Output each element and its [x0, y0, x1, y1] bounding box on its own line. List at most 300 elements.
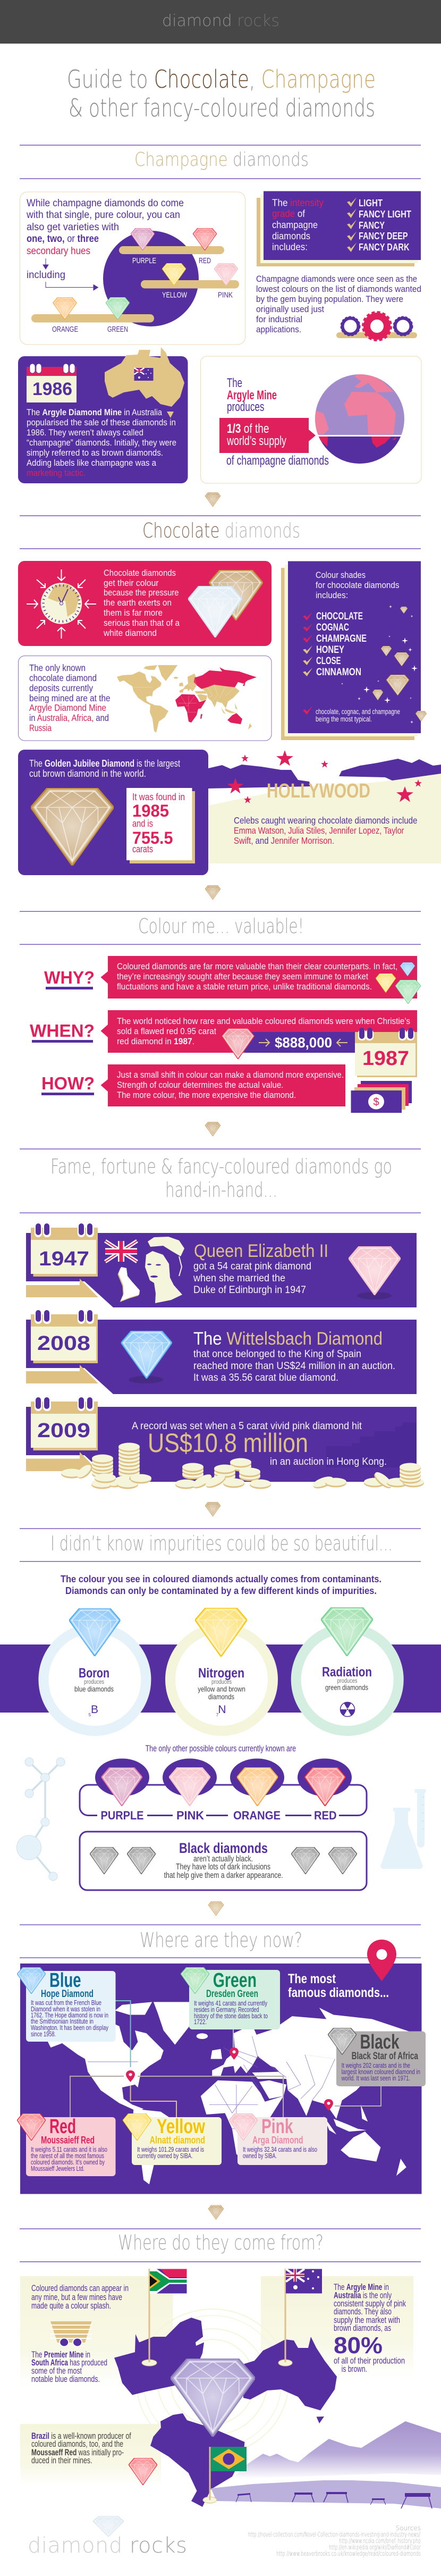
pressure text: serious than that of a — [104, 618, 180, 628]
black diamond text: aren’t actually black. — [193, 1855, 253, 1864]
Argyle paragraph: Adding labels like champagne was a — [27, 458, 157, 468]
flag: UK — [105, 1241, 137, 1262]
jubilee text — [29, 758, 180, 779]
text: Wittelsbach: The Wittelsbach Diamond — [193, 1329, 383, 1349]
text: Argyle Australia: The Argyle Mine in — [334, 2283, 389, 2292]
world map — [44, 2002, 419, 2184]
colour labels: YELLOW — [162, 290, 188, 300]
text: Premier Mine: notable blue diamonds. — [31, 2374, 100, 2384]
purple band — [0, 1644, 441, 1713]
Argyle paragraph: marketing tactic. — [27, 468, 86, 478]
card: Pink — [229, 2113, 327, 2165]
section heading: where are they now: Where are they now? — [140, 1928, 302, 1952]
Nitrogen text: 7 — [216, 1713, 219, 1717]
panel: 1986 Argyle — [18, 347, 188, 483]
card: Red: the rarest of all the most famous — [31, 2152, 104, 2160]
map: Africa — [114, 2318, 204, 2395]
Hollywood sign: HOLLYWOOD — [267, 780, 370, 802]
pressure arrows — [27, 569, 96, 639]
text: Argyle Australia: supply the market with — [334, 2315, 400, 2325]
flag: Brazil — [203, 2447, 247, 2503]
shades intro: for chocolate diamonds — [316, 580, 400, 590]
panel: 2009 record — [26, 1397, 424, 1491]
when text — [117, 1016, 410, 1046]
text: other colours: The only other possible colours currently known are — [146, 1744, 296, 1753]
Argyle paragraph: 1986. They weren’t always called — [27, 428, 143, 438]
Nitrogen text: produces — [211, 1679, 232, 1685]
intro text — [26, 198, 184, 281]
shades intro — [316, 570, 400, 600]
panel: other colours — [80, 1759, 367, 1822]
card: Black: Black — [360, 2031, 400, 2053]
panel backgrounds — [20, 2276, 413, 2486]
colour labels: ORANGE — [52, 325, 78, 334]
coins — [61, 1443, 424, 1491]
note: chocolate, cognac, and champagne — [316, 708, 400, 716]
why text: fluctuations and have a stable return price, unlike traditional diamonds. — [117, 981, 372, 992]
intensity text: diamonds — [272, 231, 310, 241]
card: Green: Dresden Green — [206, 1988, 258, 2000]
text: champagne history: applications. — [256, 325, 301, 334]
text: Argyle Australia: brown diamonds, as — [334, 2323, 391, 2333]
why text: Coloured diamonds are far more valuable than their clear counterparts. In fact, — [117, 961, 397, 971]
Boron text: produces — [84, 1679, 104, 1685]
calendar 1987 — [355, 1028, 417, 1077]
gems: black — [90, 1847, 357, 1874]
text: Queen: when she married the — [193, 1273, 285, 1284]
header bar — [0, 0, 441, 44]
gem: yellow — [195, 1608, 247, 1657]
icon: gears — [336, 313, 417, 340]
text: Wittelsbach: reached more than US$24 million in an auction. — [193, 1361, 395, 1372]
text: contaminants intro — [61, 1573, 381, 1596]
title: Guide to Chocolate, Champagne — [67, 65, 376, 94]
colour labels: PINK — [218, 290, 233, 300]
text: coloured diamonds appear: Coloured diamonds can appear in — [31, 2284, 129, 2293]
panel: world map of famous diamonds — [17, 1964, 426, 2194]
headline — [288, 1971, 389, 2000]
fact card: and is — [132, 818, 153, 829]
Argyle paragraph: popularised the sale of these diamonds in — [27, 418, 176, 427]
card: Blue: Blue — [49, 1969, 81, 1992]
share text: 1/3 of the — [227, 422, 269, 436]
text: coloured diamonds appear — [31, 2284, 129, 2311]
card: Yellow: currently owned by SIBA. — [137, 2152, 193, 2160]
connector lines — [70, 2001, 381, 2117]
card: Red: It weighs 5.11 carats and it is also — [31, 2145, 107, 2153]
intensity list — [359, 198, 411, 253]
bars — [31, 246, 239, 322]
intro text: secondary hues — [27, 246, 90, 257]
card: Blue: Washington. It has been on display — [31, 2024, 108, 2032]
text: contaminants intro: The colour you see in coloured diamonds actually comes from contaminants. — [61, 1573, 381, 1584]
fact card: 1985 — [132, 801, 169, 820]
colour labels: PURPLE — [132, 256, 156, 265]
gem: white — [188, 586, 242, 637]
card: Red: coloured diamonds. It’s owned by — [31, 2158, 105, 2166]
shades list — [316, 611, 367, 678]
globe — [313, 372, 406, 466]
card: Blue: 1762. The Hope diamond is now in — [31, 2011, 108, 2019]
card: Pink: owned by SIBA. — [243, 2152, 277, 2160]
text: Argyle Australia: 80% — [334, 2332, 383, 2359]
card: Pink: Pink — [261, 2116, 293, 2138]
gem: red — [222, 1028, 255, 1059]
colour labels: RED — [199, 256, 211, 265]
gem: orange — [237, 1767, 278, 1806]
calendar 2008 — [31, 1310, 98, 1363]
banner arrow — [26, 1365, 98, 1383]
celebs text: Celebs caught wearing chocolate diamonds include — [234, 815, 418, 826]
text: champagne history: Champagne diamonds were once seen as the — [256, 274, 417, 284]
colour names: PINK — [176, 1809, 204, 1822]
Nitrogen text: N — [218, 1704, 226, 1716]
frame — [80, 1785, 367, 1815]
gem: chocolate — [209, 570, 263, 620]
section heading: colour me valuable: Colour me... valuable! — [138, 914, 304, 938]
text: Premier Mine: The Premier Mine in — [31, 2350, 90, 2360]
jubilee text: The Golden Jubilee Diamond is the largest — [29, 758, 180, 769]
shades list: CINNAMON — [316, 667, 361, 678]
ring: Radiation — [296, 1607, 398, 1731]
text: Wittelsbach: that once belonged to the King of Spain — [193, 1348, 361, 1360]
flag: South Africa — [142, 2269, 187, 2366]
shades intro: Colour shades — [316, 570, 366, 580]
intro text: one, two, or three — [27, 233, 99, 245]
share text: The — [227, 376, 242, 390]
banner arrow — [26, 1452, 98, 1471]
mining text: chocolate diamond — [29, 673, 97, 683]
title — [67, 65, 376, 122]
calendar 2009: 2009 — [37, 1420, 90, 1442]
logo text: diamond rocks — [28, 2533, 187, 2558]
fact card: 755.5 — [132, 828, 173, 848]
intensity text: The intensity — [272, 198, 324, 208]
colour names — [101, 1809, 337, 1822]
card: Red — [17, 2113, 116, 2176]
label: why: WHY? — [44, 968, 95, 987]
intro text: While champagne diamonds do come — [27, 198, 184, 209]
gem: blue — [69, 1608, 120, 1656]
fact card: carats — [132, 844, 153, 854]
label: when: WHEN? — [30, 1021, 95, 1041]
Boron text: B — [91, 1704, 98, 1716]
gem: green — [106, 297, 130, 320]
text: Queen: Duke of Edinburgh in 1947 — [193, 1285, 306, 1296]
text: Brazil: Moussaeff Red was initially pro- — [31, 2448, 124, 2457]
ring: Nitrogen — [170, 1608, 273, 1731]
text: Argyle Australia: consistent supply of pink — [334, 2299, 406, 2309]
panel: how — [41, 1064, 412, 1113]
intensity text: champagne — [272, 220, 318, 230]
banknotes: $ — [373, 1096, 379, 1108]
shades intro: includes: — [316, 590, 348, 600]
share text: world’s supply — [226, 434, 286, 448]
jubilee text: cut brown diamond in the world. — [29, 768, 146, 779]
calendar 1986: 1986 — [32, 379, 72, 399]
calendar 1947 — [31, 1223, 98, 1277]
shade check marks — [303, 612, 312, 715]
calendar 1987: 1987 — [362, 1047, 409, 1070]
gem: pink — [169, 1767, 210, 1806]
why text: they’re increasingly sought after because they seem immune to market — [117, 971, 368, 981]
panel: 2008 Wittelsbach — [26, 1310, 417, 1394]
colour names: RED — [314, 1809, 337, 1822]
Nitrogen text: yellow and brown — [198, 1684, 245, 1693]
Radiation text: green diamonds — [325, 1683, 368, 1692]
text: Brazil: duced in their mines. — [31, 2456, 92, 2465]
banknotes — [351, 1081, 412, 1113]
Nitrogen text: Nitrogen — [198, 1666, 244, 1681]
black diamond text: that help give them a darker appearance. — [164, 1871, 283, 1880]
fact card — [126, 788, 195, 863]
text: Brazil — [31, 2431, 131, 2465]
Boron text: Boron — [79, 1666, 109, 1681]
concentric rings — [137, 2309, 289, 2455]
section heading: fame fortune: hand-in-hand... — [165, 1178, 277, 1202]
gem: pink — [214, 263, 238, 286]
divider gem — [208, 2205, 224, 2219]
calendar 1986 — [27, 364, 77, 402]
colour labels: GREEN — [107, 325, 128, 334]
logo wordmark: diamond rocks — [162, 12, 279, 30]
card: Yellow — [123, 2113, 222, 2165]
gem: orange — [53, 297, 77, 320]
arrows — [43, 258, 98, 290]
text: coloured diamonds appear: made quite a colour splash. — [31, 2301, 111, 2311]
card: Red: Moussaieff Red — [41, 2135, 95, 2146]
Argyle paragraph: simply referred to as brown diamonds. — [27, 448, 163, 458]
illustration: flask and test tube — [380, 1789, 426, 1869]
how text: Just a small shift in colour can make a diamond more expensive. — [117, 1070, 344, 1080]
mining text: in Australia, Africa, and — [29, 712, 109, 723]
Nitrogen text — [198, 1666, 245, 1717]
gem: yellow — [162, 263, 186, 286]
Nitrogen text: diamonds — [208, 1692, 234, 1701]
gem: red — [129, 2458, 157, 2485]
city skyline — [326, 1422, 417, 1467]
text: Queen: Queen Elizabeth II — [194, 1241, 328, 1261]
text: Premier Mine: South Africa has produced — [31, 2358, 107, 2368]
pink arrow banner — [219, 418, 316, 453]
card: Green — [181, 1967, 280, 2029]
panel: where chocolate diamonds are mined — [18, 656, 272, 741]
when text: sold a flawed red 0.95 carat — [117, 1026, 216, 1036]
illustration: mountains — [211, 2421, 441, 2508]
text: Wittelsbach: It was a 35.56 carat blue diamond. — [193, 1372, 338, 1383]
card: Black: It weighs 202 carats and is the — [342, 2061, 410, 2069]
pressure text: the earth exerts on — [104, 598, 172, 608]
why text — [117, 961, 397, 992]
card: Pink: It weighs 32.34 carats and is also — [243, 2145, 317, 2153]
fact card: It was found in — [132, 792, 185, 802]
Boron text — [74, 1666, 114, 1717]
text: Argyle Australia: of all of their production — [334, 2356, 405, 2366]
panel: Argyle share of world supply — [201, 356, 421, 483]
mining text: Russia — [29, 723, 52, 733]
stars — [227, 750, 422, 803]
gem: purple — [101, 1767, 142, 1806]
mine stands — [236, 2492, 432, 2508]
shades list: COGNAC — [316, 622, 349, 633]
section heading: chocolate diamonds: Chocolate diamonds — [142, 519, 300, 542]
text: coloured diamonds appear: any mine, but a few mines have — [31, 2293, 122, 2302]
flag: Australia — [134, 368, 153, 381]
calendar 2009 — [31, 1397, 98, 1450]
Argyle paragraph — [27, 408, 176, 478]
how text — [117, 1070, 344, 1100]
note: being the most typical. — [316, 715, 372, 723]
black diamond text — [164, 1840, 283, 1880]
sparkles — [341, 605, 418, 724]
shades list: CLOSE — [316, 656, 341, 667]
card: Yellow: Yellow — [157, 2116, 205, 2138]
share text: of champagne diamonds — [226, 454, 329, 468]
map pins — [126, 2048, 333, 2111]
pressure text — [103, 568, 180, 638]
divider gem — [205, 885, 220, 900]
text: Queen: got a 54 carat pink diamond — [193, 1261, 311, 1272]
headline: famous diamonds... — [288, 1985, 389, 2000]
price bar: $888,000 — [275, 1035, 332, 1051]
ring: Boron — [44, 1608, 146, 1731]
card: Red: Moussaieff Jewelers Ltd. — [31, 2164, 84, 2172]
text: Premier Mine — [31, 2350, 107, 2384]
pressure text: Chocolate diamonds — [104, 568, 176, 578]
map: Australia — [105, 347, 184, 418]
panel: colour shades — [281, 561, 427, 740]
icon: mine cart — [50, 2321, 92, 2347]
text: Queen — [193, 1241, 328, 1296]
map: Brazil — [150, 2413, 244, 2507]
colour names: PURPLE — [101, 1809, 143, 1822]
panel: why chocolate is brown — [18, 561, 272, 646]
text: Brazil: coloured diamonds, too, and the — [31, 2439, 123, 2449]
text: Argyle Australia — [334, 2283, 406, 2374]
intensity text — [272, 198, 324, 252]
colour names: ORANGE — [233, 1809, 281, 1822]
text: champagne history: by the gem buying population. They were — [256, 295, 403, 304]
text: Wittelsbach — [193, 1329, 395, 1383]
gem: purple — [131, 228, 155, 250]
text: record — [132, 1421, 387, 1467]
mining text: deposits currently — [29, 683, 93, 693]
black diamond text: They have lots of dark inclusions — [176, 1862, 270, 1872]
text: Argyle Australia: diamonds. They also — [334, 2307, 392, 2317]
gem: green — [321, 1607, 373, 1656]
intro text: also get varieties with — [27, 222, 119, 233]
panel: Golden Jubilee — [18, 750, 208, 875]
card: Black: world. It was last seen in 1971. — [341, 2074, 410, 2082]
card: Blue: Hope Diamond — [41, 1988, 94, 2000]
circle: orange — [230, 1759, 284, 1796]
card: Red: Red — [49, 2116, 76, 2138]
circle: pink — [163, 1759, 217, 1796]
card: Yellow: Alnatt diamond — [150, 2135, 205, 2146]
check marks — [347, 197, 357, 252]
gem: red — [193, 228, 217, 250]
note — [316, 708, 400, 723]
celebs text: Emma Watson, Julia Stiles, Jennifer Lopez, Taylor — [234, 825, 404, 836]
card: Blue: Diamond when it was stolen in — [31, 2005, 100, 2013]
text: champagne history: lowest colours on the list of diamonds wanted — [256, 284, 421, 294]
text: champagne history: for industrial — [256, 315, 302, 324]
shades list: CHAMPAGNE — [316, 633, 367, 644]
circle: red — [298, 1759, 352, 1796]
icon: radiation — [340, 1702, 355, 1716]
card: Pink: Arga Diamond — [252, 2135, 303, 2146]
text: record: US$10.8 million — [148, 1428, 308, 1458]
logo gem — [93, 2516, 124, 2537]
card: Blue: It was cut from the French Blue — [31, 1999, 101, 2007]
intro text: with that single, pure colour, you can — [26, 209, 180, 221]
gem: pink — [349, 1246, 401, 1299]
price bar — [244, 1032, 355, 1053]
panel: black diamonds — [80, 1832, 367, 1890]
panel: when — [30, 1010, 417, 1077]
section heading: champagne diamonds: Champagne diamonds — [134, 149, 309, 171]
flag: Australia — [278, 2269, 322, 2366]
floating gems — [372, 607, 427, 721]
text: record: in an auction in Hong Kong. — [270, 1456, 387, 1467]
pressure text: get their colour — [104, 578, 159, 588]
black diamond text: Black diamonds — [179, 1840, 268, 1856]
card: Blue — [17, 1967, 116, 2042]
Argyle paragraph: The Argyle Diamond Mine in Australia — [27, 408, 163, 417]
shades list: HONEY — [316, 644, 344, 656]
headline: The most — [288, 1971, 336, 1986]
gems — [376, 962, 421, 1004]
when text: The world noticed how rare and valuable coloured diamonds were when Christie’s — [117, 1016, 410, 1026]
pressure text: them is far more — [104, 608, 163, 618]
Radiation text: produces — [337, 1678, 358, 1684]
colour labels — [52, 256, 233, 334]
calendar 1947: 1947 — [39, 1248, 89, 1270]
section heading: fame fortune — [50, 1155, 392, 1202]
text: champagne history — [256, 274, 421, 334]
Boron text: 5 — [89, 1713, 91, 1717]
mining text — [29, 662, 111, 733]
card: Green: resides in Germany. Recorded — [194, 2006, 259, 2013]
sources: Sources — [396, 2524, 421, 2532]
intensity list: LIGHT — [359, 198, 383, 208]
card: Blue: since 1958. — [31, 2030, 56, 2038]
text: Brazil: Brazil is a well-known producer of — [31, 2431, 131, 2441]
panel: 1947 Queen Elizabeth — [26, 1223, 417, 1307]
gem: blue — [121, 1331, 172, 1383]
pressure text: because the pressure — [104, 588, 179, 598]
intensity list: FANCY DARK — [359, 242, 409, 253]
celebs text — [234, 815, 418, 846]
card: Yellow: It weighs 101.29 carats and is — [137, 2145, 204, 2153]
text: champagne history: originally used just — [256, 305, 324, 314]
card: Green: Green — [213, 1969, 257, 1992]
card: Black — [328, 2028, 426, 2086]
gem: Golden Jubilee — [31, 788, 114, 866]
banner arrow — [26, 1279, 98, 1297]
intensity text: grade of — [272, 208, 306, 219]
how text: The more colour, the more expensive the diamond. — [117, 1090, 296, 1100]
divider gem — [208, 1901, 224, 1916]
share text: Argyle Mine — [227, 388, 277, 402]
Argyle paragraph: “champagne” diamonds. Initially, they were — [27, 438, 176, 448]
intensity list: FANCY DEEP — [359, 231, 408, 241]
footer logo — [28, 2516, 187, 2558]
intensity text: includes: — [272, 241, 308, 252]
clock icon — [41, 583, 82, 624]
large map pin — [367, 1940, 396, 1981]
text: record: A record was set when a 5 carat vivid pink diamond hit — [132, 1421, 362, 1432]
